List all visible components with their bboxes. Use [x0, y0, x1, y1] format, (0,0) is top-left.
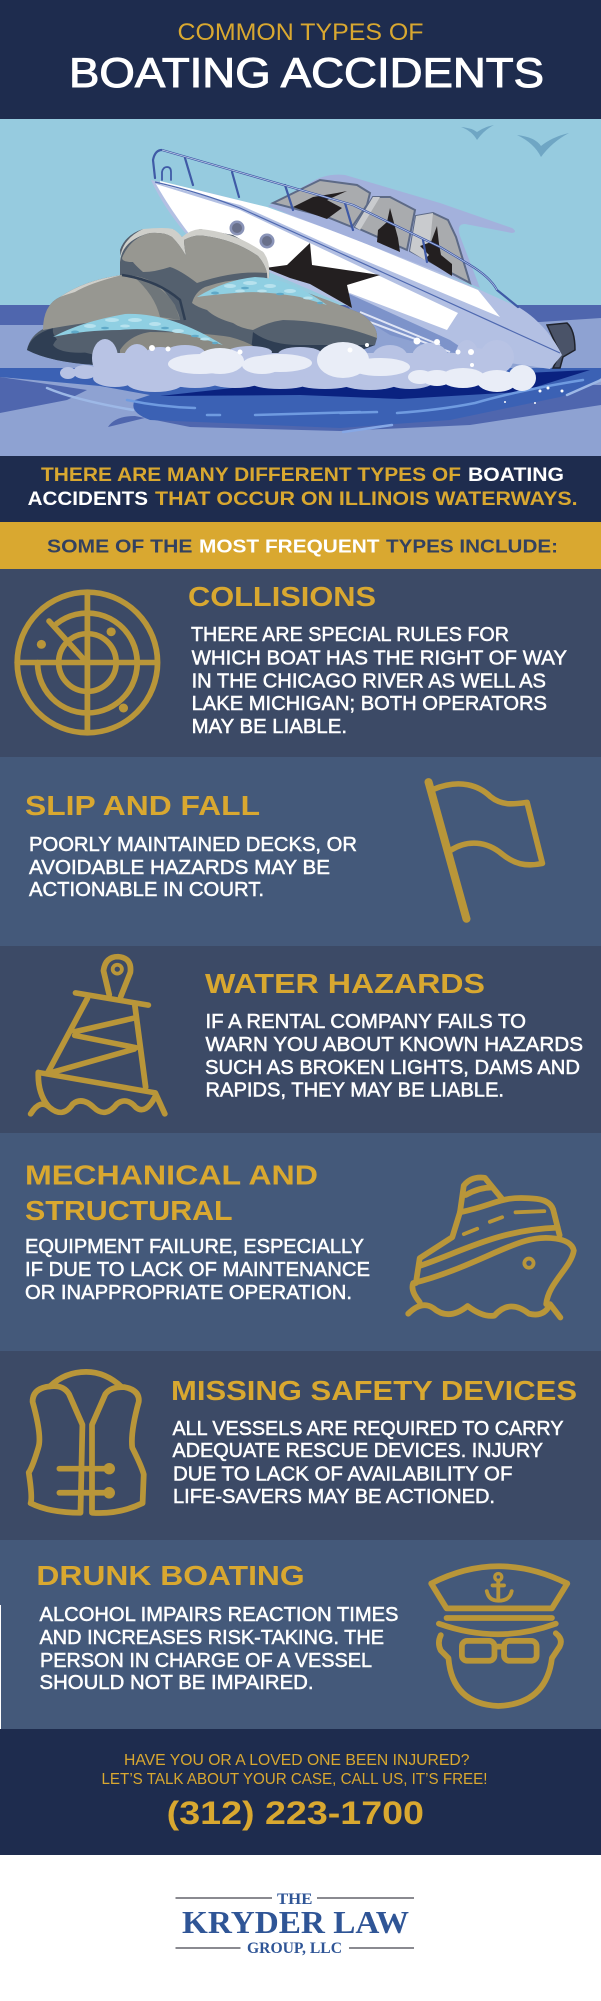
call to action footer [0, 1729, 601, 1855]
water spray on rocks [53, 277, 327, 345]
portholes [230, 220, 244, 236]
cabin [268, 175, 515, 288]
icon: radar [17, 592, 158, 733]
intro text: BOATING [468, 464, 564, 486]
logo: The Kryder Law Group: THE [277, 1891, 312, 1908]
intro band [0, 456, 601, 522]
call to action text: HAVE YOU OR A LOVED ONE BEEN INJURED? [124, 1752, 470, 1769]
heading [25, 1160, 318, 1226]
body text: SUCH AS BROKEN LIGHTS, DAMS AND [205, 1057, 580, 1079]
phone number: (312) 223-1700 [167, 1795, 424, 1831]
body text: DUE TO LACK OF AVAILABILITY OF [173, 1464, 512, 1486]
logo: The Kryder Law Group: GROUP, LLC [247, 1940, 342, 1957]
body text: RAPIDS, THEY MAY BE LIABLE. [206, 1080, 504, 1102]
panel: drunk boating [0, 1540, 601, 1729]
header panel [0, 0, 601, 119]
body text: OR INAPPROPRIATE OPERATION. [25, 1282, 352, 1304]
outboard motor [547, 323, 575, 368]
body text: POORLY MAINTAINED DECKS, OR [29, 834, 357, 856]
rocks [27, 228, 377, 365]
boat [151, 150, 562, 369]
body text [191, 624, 567, 738]
body text: WARN YOU ABOUT KNOWN HAZARDS [206, 1034, 583, 1056]
icon: buoy [31, 957, 165, 1114]
intro text: ACCIDENTS [28, 488, 148, 510]
illustration: boat crashed on rocks [0, 119, 601, 456]
panel: mechanical and structural [0, 1133, 601, 1351]
logo: The Kryder Law Group [176, 1891, 414, 1957]
hull hole [265, 243, 380, 308]
icon: ship [408, 1178, 574, 1318]
panel: slip and fall [0, 757, 601, 946]
body text: ACTIONABLE IN COURT. [29, 879, 264, 901]
body text [172, 1418, 564, 1508]
subheading text: TYPES INCLUDE: [386, 536, 558, 557]
foam [60, 338, 564, 404]
heading: DRUNK BOATING [36, 1560, 305, 1591]
body text [40, 1604, 399, 1694]
title line 2: BOATING ACCIDENTS [69, 49, 544, 96]
call to action footer: LET’S TALK ABOUT YOUR CASE, CALL US, IT’S FREE! [102, 1771, 488, 1788]
subheading text: SOME OF THE [47, 536, 192, 557]
water [0, 368, 601, 432]
body text: SHOULD NOT BE IMPAIRED. [40, 1672, 314, 1694]
gold subheading band [0, 522, 601, 569]
body text [25, 1236, 370, 1304]
panel: missing safety devices [0, 1351, 601, 1540]
body text: AND INCREASES RISK-TAKING. THE [40, 1627, 384, 1649]
body text: WHICH BOAT HAS THE RIGHT OF WAY [192, 647, 567, 669]
intro text: THERE ARE MANY DIFFERENT TYPES OF [41, 464, 461, 486]
body text: ADEQUATE RESCUE DEVICES. INJURY [172, 1440, 543, 1462]
body text: IN THE CHICAGO RIVER AS WELL AS [192, 670, 546, 692]
subheading text: MOST FREQUENT [199, 536, 380, 557]
railing [153, 150, 518, 307]
icon: captain [431, 1566, 567, 1706]
body text: AVOIDABLE HAZARDS MAY BE [29, 857, 330, 879]
heading: MISSING SAFETY DEVICES [171, 1375, 577, 1406]
body text: LAKE MICHIGAN; BOTH OPERATORS [192, 693, 547, 715]
icon: birds [461, 125, 569, 157]
body text: EQUIPMENT FAILURE, ESPECIALLY [25, 1236, 364, 1258]
logo: The Kryder Law Group: KRYDER LAW [182, 1904, 409, 1940]
heading: SLIP AND FALL [25, 790, 260, 821]
body text [205, 1011, 583, 1102]
subheading text [47, 536, 558, 557]
heading: MECHANICAL AND [25, 1160, 318, 1191]
body text: MAY BE LIABLE. [192, 716, 347, 738]
body text: IF A RENTAL COMPANY FAILS TO [206, 1011, 526, 1033]
body text: PERSON IN CHARGE OF A VESSEL [40, 1650, 372, 1672]
icon: life vest [29, 1372, 144, 1513]
panel: collisions [0, 569, 601, 757]
title line 1: COMMON TYPES OF [178, 19, 424, 46]
body text: ALL VESSELS ARE REQUIRED TO CARRY [172, 1418, 564, 1440]
heading: COLLISIONS [188, 581, 376, 612]
body text: THERE ARE SPECIAL RULES FOR [191, 624, 509, 646]
intro text [28, 464, 578, 510]
icon: flag [429, 782, 542, 919]
heading: STRUCTURAL [25, 1195, 233, 1226]
body text: IF DUE TO LACK OF MAINTENANCE [25, 1259, 370, 1281]
body text [29, 834, 357, 901]
intro text: THAT OCCUR ON ILLINOIS WATERWAYS. [155, 488, 578, 510]
heading: WATER HAZARDS [205, 968, 485, 999]
panel: water hazards [0, 946, 601, 1133]
body text: LIFE-SAVERS MAY BE ACTIONED. [173, 1486, 495, 1508]
body text: ALCOHOL IMPAIRS REACTION TIMES [40, 1604, 399, 1626]
